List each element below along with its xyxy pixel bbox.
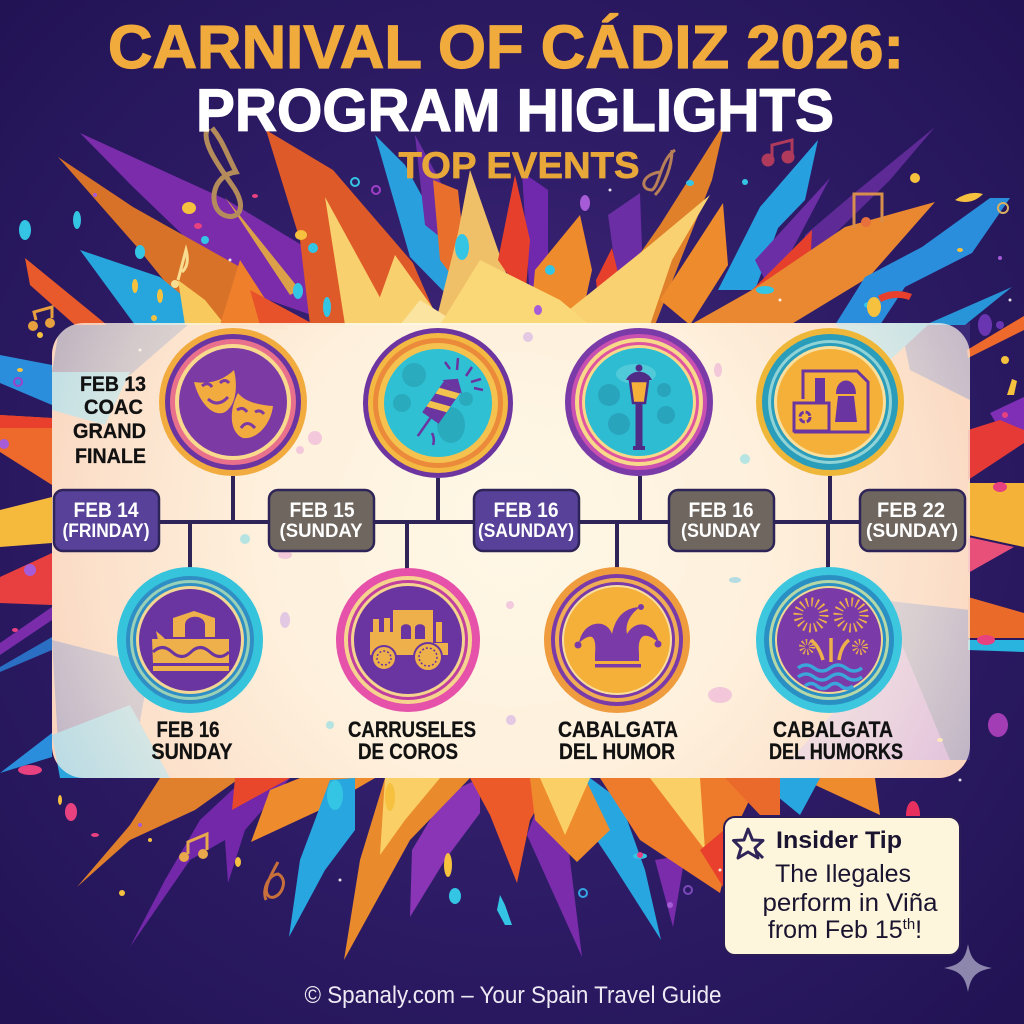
icon: sparkle bbox=[944, 944, 992, 992]
medallion: parade float bbox=[117, 567, 263, 713]
label: Feb 13 Coac Grand Finale: COAC bbox=[84, 396, 143, 419]
label: Cabalgata del Humor: CABALGATA bbox=[558, 717, 678, 742]
tip body: th bbox=[903, 916, 915, 933]
icon: carriage bbox=[370, 610, 448, 655]
centre fill above panel bbox=[440, 260, 590, 325]
bottom rays bbox=[130, 778, 290, 947]
icon: bursts bbox=[798, 602, 865, 662]
label: Feb 13 Coac Grand Finale: FEB 13 bbox=[80, 373, 146, 396]
subtitle: TOP EVENTS bbox=[398, 145, 640, 186]
date box: Feb 16 grey bbox=[669, 490, 774, 551]
date box: Feb 15: (SUNDAY bbox=[280, 521, 363, 542]
icon: sad mask bbox=[232, 393, 273, 438]
medallion: carriage bbox=[336, 568, 480, 712]
date box: Feb 14: (FRINDAY) bbox=[62, 521, 150, 542]
label: Cabalgata del Humorks bbox=[769, 717, 903, 764]
icon: note tan bbox=[854, 194, 882, 228]
icon: rocket bbox=[408, 372, 468, 443]
title line 2: PROGRAM HIGLIGHTS bbox=[196, 77, 834, 144]
panel confetti bbox=[240, 332, 750, 729]
label: Carruseles de Coros: DE COROS bbox=[358, 739, 458, 764]
top left rays bbox=[80, 133, 340, 325]
rings bbox=[14, 178, 1008, 897]
medallion: jester hat bbox=[544, 567, 690, 713]
date box: Feb 15 bbox=[269, 490, 374, 551]
confetti and musical notes bbox=[0, 128, 1017, 925]
date box: Feb 22: FEB 22 bbox=[877, 499, 945, 522]
tip heading: Insider Tip bbox=[776, 827, 902, 854]
label: Feb 13 Coac Grand Finale bbox=[73, 373, 146, 468]
date box: Feb 16 purple: (SAUNDAY) bbox=[478, 521, 574, 542]
icon: jester hat bbox=[574, 604, 662, 668]
blotches bbox=[393, 363, 473, 443]
date box: Feb 15: FEB 15 bbox=[290, 499, 355, 522]
date box: Feb 16 grey: (SUNDAY bbox=[681, 521, 761, 542]
date box: Feb 22: (SUNDAY) bbox=[866, 521, 958, 542]
under-panel tint bbox=[52, 323, 970, 778]
date box: Feb 22 bbox=[860, 490, 965, 551]
label: Carruseles de Coros: CARRUSELES bbox=[348, 717, 476, 742]
icon: note red bbox=[763, 140, 793, 165]
date box: Feb 16 grey: FEB 16 bbox=[688, 499, 754, 522]
date box: Feb 14: FEB 14 bbox=[74, 499, 139, 522]
label: Feb 13 Coac Grand Finale: GRAND bbox=[73, 420, 146, 443]
tip body bbox=[762, 860, 938, 944]
label: Feb 13 Coac Grand Finale: FINALE bbox=[75, 445, 146, 468]
medallion: firework rocket bbox=[363, 328, 513, 478]
top centre rays bbox=[522, 172, 548, 300]
icon: float bbox=[152, 611, 229, 671]
label: Carruseles de Coros bbox=[348, 717, 476, 764]
footer credit: © Spanaly.com – Your Spain Travel Guide bbox=[304, 982, 722, 1009]
wheels bbox=[372, 643, 442, 671]
date box: Feb 16 purple bbox=[474, 490, 579, 551]
medallion: street lamp bbox=[565, 328, 713, 476]
medallion: fireworks over water bbox=[756, 567, 902, 713]
icon: waves bbox=[798, 665, 862, 688]
icon: building document bbox=[794, 371, 868, 432]
icon: note left bbox=[28, 307, 55, 331]
tip body: from Feb 15 bbox=[768, 916, 903, 944]
icon: treble clef right bbox=[644, 150, 675, 195]
medallion: document and tower bbox=[756, 328, 904, 476]
label: Feb 16 Sunday bbox=[152, 717, 233, 764]
label: Feb 16 Sunday: SUNDAY bbox=[152, 739, 233, 764]
label: Cabalgata del Humorks: CABALGATA bbox=[773, 717, 893, 742]
label: Feb 16 Sunday: FEB 16 bbox=[156, 717, 220, 742]
icon: lamp bbox=[626, 364, 652, 450]
icon: star bbox=[734, 829, 763, 858]
callout: insider tip bbox=[724, 817, 960, 955]
tip body: ! bbox=[915, 916, 922, 944]
right edge bands bbox=[967, 316, 1024, 358]
icon: happy mask bbox=[194, 370, 236, 413]
icon: note bottom bbox=[179, 834, 208, 862]
icon: treble clef bottom bbox=[265, 862, 283, 900]
title line 1: CARNIVAL OF CÁDIZ 2026: bbox=[108, 13, 904, 81]
blotches bbox=[598, 364, 675, 435]
timeline connector bbox=[159, 476, 859, 570]
label: Cabalgata del Humor: DEL HUMOR bbox=[559, 739, 675, 764]
label: Cabalgata del Humorks: DEL HUMORKS bbox=[769, 739, 903, 764]
top right rays bbox=[590, 122, 725, 325]
label: Cabalgata del Humor bbox=[558, 717, 678, 764]
left edge bands bbox=[0, 355, 52, 405]
panel: timeline background bbox=[52, 323, 970, 778]
icon: note cream bbox=[171, 250, 187, 288]
tip body: The Ilegales bbox=[775, 860, 911, 888]
medallion: theatre masks bbox=[159, 328, 307, 476]
date box: Feb 16 purple: FEB 16 bbox=[494, 499, 558, 522]
icon: treble clef left bbox=[206, 128, 241, 216]
title bbox=[108, 13, 904, 186]
date box: Feb 14 bbox=[54, 490, 159, 551]
tip body: perform in Viña bbox=[762, 889, 938, 917]
